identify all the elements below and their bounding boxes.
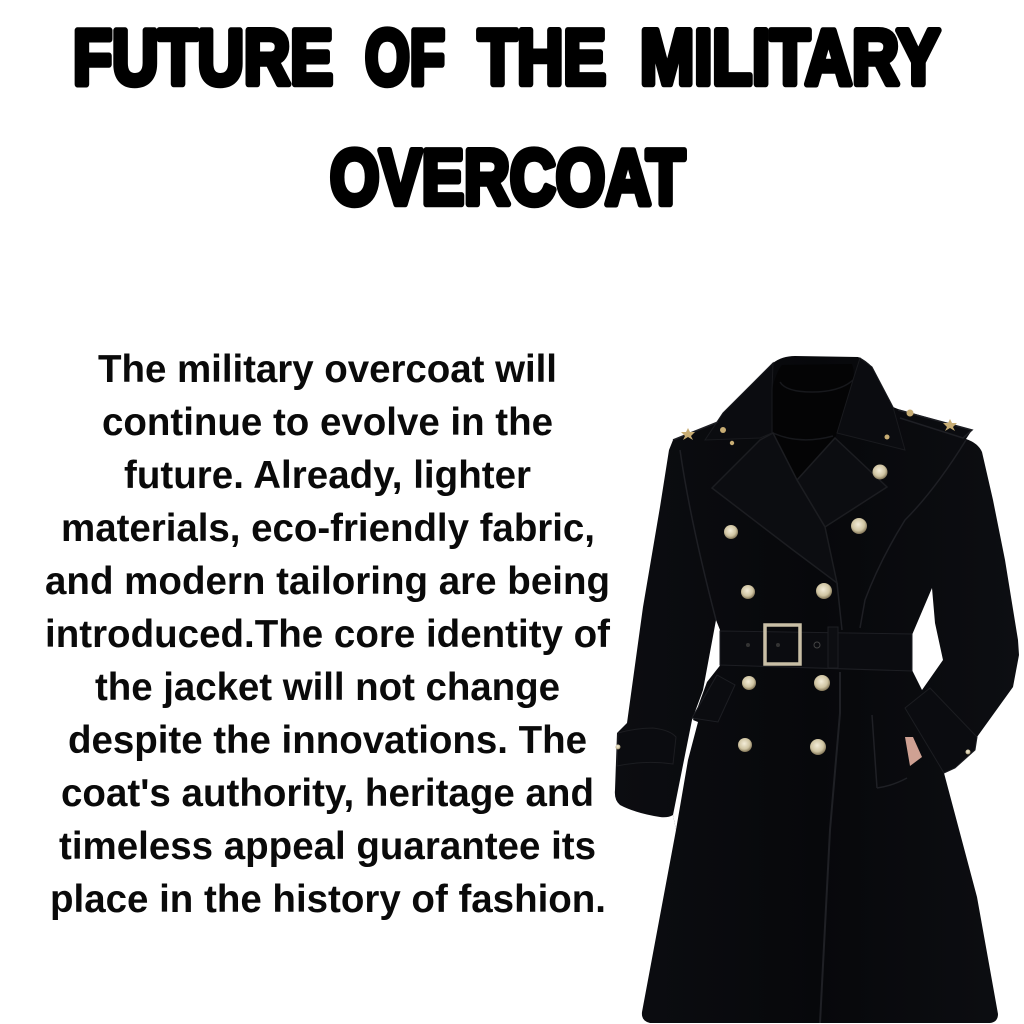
left collar bbox=[705, 363, 773, 440]
right cuff strap bbox=[905, 688, 977, 773]
left lapel bbox=[712, 433, 837, 583]
pocket opening bbox=[872, 715, 907, 788]
body paragraph: despite the innovations. The bbox=[68, 719, 587, 762]
belt buckle bbox=[765, 625, 800, 664]
epaulette insignia bbox=[681, 410, 957, 445]
body paragraph: future. Already, lighter bbox=[124, 454, 531, 497]
hand in pocket bbox=[905, 737, 922, 766]
belt bbox=[720, 627, 912, 671]
right lapel bbox=[797, 438, 887, 527]
illustration: black military overcoat bbox=[615, 356, 1019, 1023]
gap between right sleeve and body bbox=[912, 588, 943, 690]
title: FUTURE bbox=[73, 13, 333, 101]
gap between left sleeve and body bbox=[673, 620, 722, 830]
left cuff bbox=[617, 728, 676, 766]
body paragraph: place in the history of fashion. bbox=[50, 878, 606, 921]
body paragraph: timeless appeal guarantee its bbox=[59, 825, 596, 868]
pocket flap bbox=[692, 675, 735, 722]
body paragraph bbox=[45, 348, 610, 921]
title: THE bbox=[478, 13, 606, 101]
title: OVERCOAT bbox=[330, 133, 685, 221]
right collar bbox=[837, 358, 905, 450]
coat silhouette bbox=[615, 356, 1019, 1023]
coat seams bbox=[673, 410, 972, 630]
turtleneck fold bbox=[773, 380, 853, 440]
body paragraph: introduced.The core identity of bbox=[45, 613, 610, 656]
body paragraph: and modern tailoring are being bbox=[45, 560, 610, 603]
title: MILITARY bbox=[640, 13, 940, 101]
body paragraph: materials, eco-friendly fabric, bbox=[61, 507, 595, 550]
centre placket seam bbox=[820, 672, 840, 1023]
gold buttons bbox=[616, 464, 970, 755]
title bbox=[73, 13, 940, 221]
title: OF bbox=[365, 13, 445, 101]
body paragraph: The military overcoat will bbox=[98, 348, 557, 391]
body paragraph: continue to evolve in the bbox=[102, 401, 553, 444]
turtleneck bbox=[772, 364, 854, 480]
body paragraph: coat's authority, heritage and bbox=[61, 772, 594, 815]
body paragraph: the jacket will not change bbox=[95, 666, 560, 709]
